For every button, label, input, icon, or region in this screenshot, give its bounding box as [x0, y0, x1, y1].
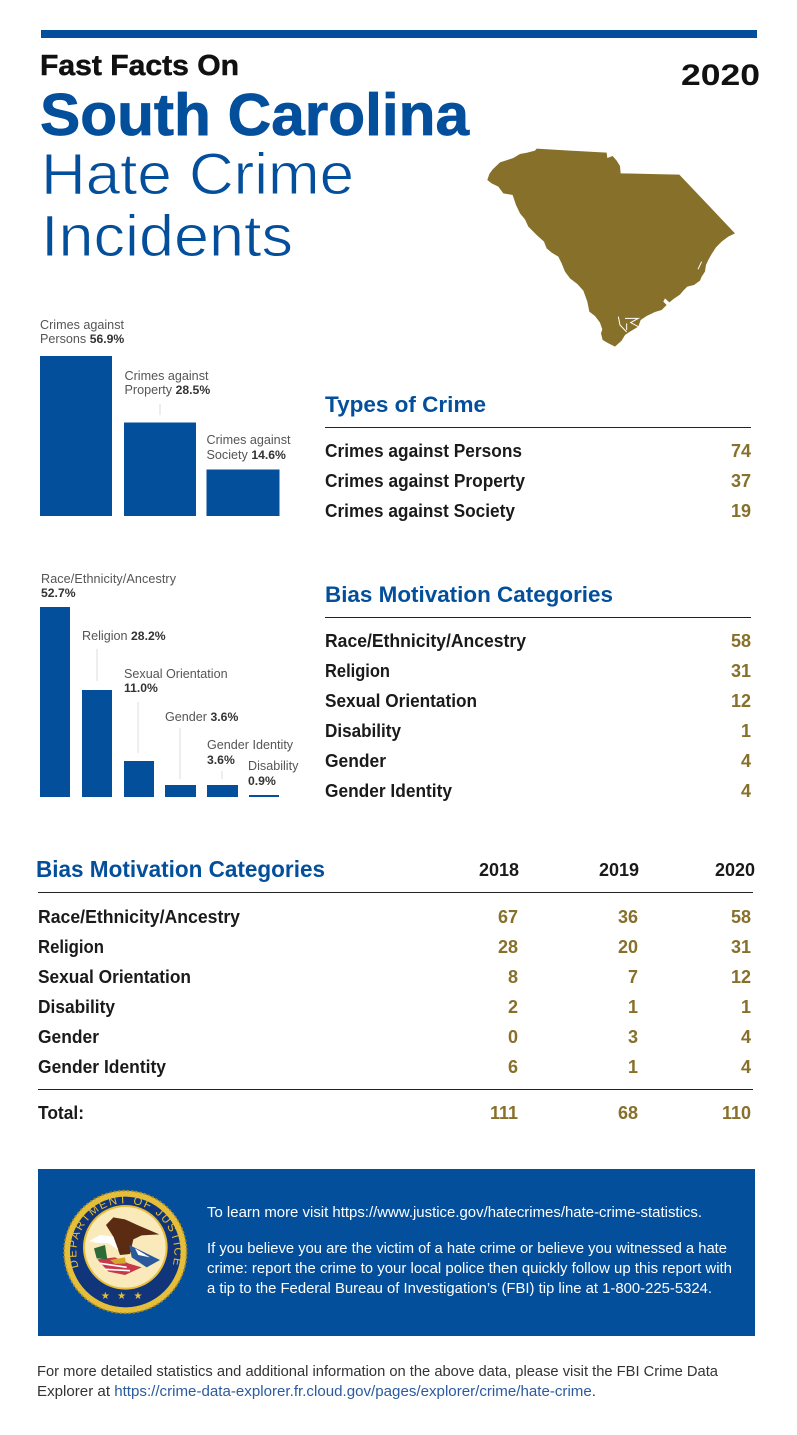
panel: bias motivation categories: Gender: [325, 751, 386, 771]
bar chart: bias motivation: Gender Identity: [207, 738, 294, 752]
footer text: [37, 1364, 719, 1400]
table: bias motivation by year: 12: [731, 967, 751, 987]
panel: bias motivation categories: Race/Ethnicity/Ancestry: [325, 631, 526, 651]
bar: persons: [40, 356, 112, 516]
contact text: crime: report the crime to your local police then quickly follow up this report with: [207, 1261, 732, 1277]
label: property: Property 28.5%: [124, 383, 210, 397]
panel: types of crime: 19: [731, 501, 751, 521]
bar chart: bias motivation: Gender 3.6%: [165, 710, 238, 724]
bar chart: bias motivation: Religion 28.2%: [82, 629, 166, 643]
label: persons: Crimes against: [40, 318, 124, 332]
panel: types of crime: Crimes against Persons: [325, 441, 522, 461]
table: bias motivation by year: 3: [628, 1027, 638, 1047]
table: bias motivation by year: 1: [628, 997, 638, 1017]
bar chart: bias motivation: Sexual Orientation: [124, 667, 228, 681]
panel: bias motivation categories: [325, 582, 751, 801]
table: bias motivation by year: 4: [741, 1027, 751, 1047]
table heading: Bias Motivation Categories: [36, 856, 325, 882]
table: bias motivation by year: 8: [508, 967, 518, 987]
contact text: [207, 1205, 732, 1297]
panel: bias motivation categories: 31: [731, 661, 751, 681]
table: bias motivation by year: Disability: [38, 997, 115, 1017]
table: bias motivation by year: 36: [618, 907, 638, 927]
title: South Carolina: [40, 82, 470, 148]
icon: DOJ seal: DEPARTMENT OF JUSTICE: [70, 1196, 181, 1268]
panel: bias motivation categories: 12: [731, 691, 751, 711]
label: society: Society 14.6%: [206, 448, 286, 462]
bar: society: [206, 470, 280, 516]
panel: bias motivation categories: Sexual Orientation: [325, 691, 477, 711]
table: bias motivation by year: 58: [731, 907, 751, 927]
table: bias motivation by year: 1: [741, 997, 751, 1017]
table: bias motivation by year: Gender Identity: [38, 1057, 166, 1077]
panel: types of crime: Crimes against Society: [325, 501, 515, 521]
label: society: Crimes against: [206, 433, 291, 447]
panel: types of crime: Crimes against Property: [325, 471, 525, 491]
table: bias motivation by year: 20: [618, 937, 638, 957]
table: bias motivation by year: 2018: [479, 860, 519, 880]
footer text: Explorer at https://crime-data-explorer.fr.cloud.gov/pages/explorer/crime/hate-crime .: [37, 1384, 596, 1400]
table: bias motivation by year: 2020: [715, 860, 755, 880]
table: bias motivation by year: Sexual Orientation: [38, 967, 191, 987]
heading: Types of Crime: [325, 392, 486, 417]
title: Fast Facts On: [40, 50, 239, 82]
label: property: Crimes against: [124, 369, 209, 383]
contact text: If you believe you are the victim of a hate crime or believe you witnessed a hate: [207, 1241, 727, 1257]
panel: bias motivation categories: Bias Motivation Categories: [325, 582, 613, 607]
table: bias motivation by year: 110: [722, 1103, 751, 1123]
bar chart: bias motivation: 3.6%: [207, 753, 235, 767]
panel: bias motivation categories: 4: [741, 781, 751, 801]
table: bias motivation by year: Total:: [38, 1103, 84, 1123]
bar chart: bias motivation: Disability: [248, 759, 299, 773]
label: persons: Persons 56.9%: [40, 332, 124, 346]
table: bias motivation by year: 67: [498, 907, 518, 927]
table: bias motivation by year: 1: [628, 1057, 638, 1077]
contact text: To learn more visit https://www.justice.gov/hatecrimes/hate-crime-statistics.: [207, 1205, 702, 1221]
table: bias motivation by year: 68: [618, 1103, 638, 1123]
bar chart: bias motivation: 52.7%: [41, 586, 76, 600]
panel: bias motivation categories: 4: [741, 751, 751, 771]
table: bias motivation by year: Gender: [38, 1027, 99, 1047]
panel: contact information: [38, 1169, 755, 1336]
title: Incidents: [41, 204, 293, 269]
icon: DOJ seal: ★★★: [101, 1291, 150, 1302]
bar: property: [124, 422, 196, 516]
table: bias motivation by year: Race/Ethnicity/Ancestry: [38, 907, 240, 927]
panel: types of crime: [325, 392, 751, 521]
bar chart: bias motivation: 11.0%: [124, 681, 158, 695]
table: bias motivation by year: 7: [628, 967, 638, 987]
table: bias motivation by year: 111: [490, 1103, 518, 1123]
bar chart: types of crime: [40, 318, 291, 516]
bar chart: bias motivation: Race/Ethnicity/Ancestry: [41, 572, 177, 586]
table: bias motivation by year: 31: [731, 937, 751, 957]
table: bias motivation by year: Religion: [38, 937, 104, 957]
panel: bias motivation categories: Religion: [325, 661, 390, 681]
title: [40, 50, 470, 269]
bar chart: bias motivation: [40, 572, 299, 797]
icon: South Carolina map: [487, 149, 735, 347]
table: bias motivation by year: 2: [508, 997, 518, 1017]
panel: bias motivation categories: 58: [731, 631, 751, 651]
table: bias motivation by year: 0: [508, 1027, 518, 1047]
panel: types of crime: 37: [731, 471, 751, 491]
table: bias motivation by year: 28: [498, 937, 518, 957]
panel: bias motivation categories: Disability: [325, 721, 401, 741]
footer text: For more detailed statistics and additional information on the above data, please visit the FBI Crime Data: [37, 1364, 719, 1380]
icon: DOJ seal: [63, 1190, 188, 1314]
title: Hate Crime: [41, 142, 354, 207]
table: bias motivation by year: 4: [741, 1057, 751, 1077]
table: bias motivation by year: 6: [508, 1057, 518, 1077]
table: bias motivation by year: 2019: [599, 860, 639, 880]
panel: bias motivation categories: Gender Identity: [325, 781, 452, 801]
panel: bias motivation categories: 1: [741, 721, 751, 741]
table: bias motivation by year: [36, 856, 755, 1123]
contact text: a tip to the Federal Bureau of Investigation’s (FBI) tip line at 1-800-225-5324.: [207, 1281, 712, 1297]
panel: types of crime: 74: [731, 441, 751, 461]
bar chart: bias motivation: 0.9%: [248, 774, 276, 788]
top bar: [41, 30, 757, 38]
year: 2020: [681, 59, 760, 92]
